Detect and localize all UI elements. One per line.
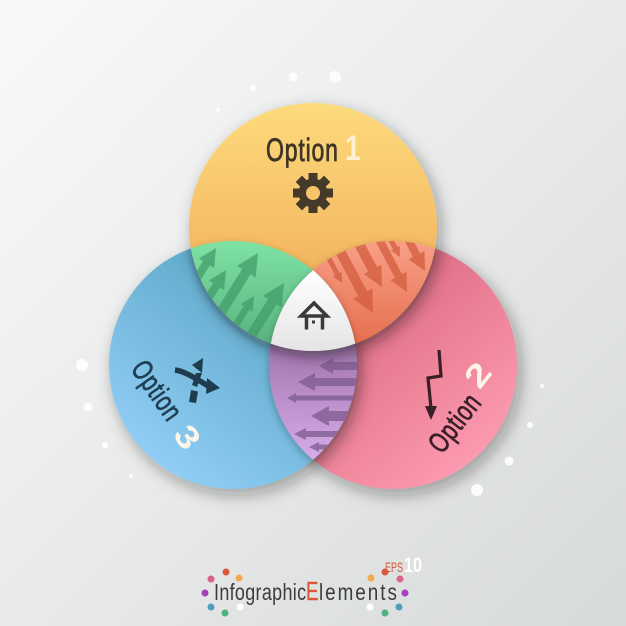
center white shape — [271, 270, 355, 351]
arrows: orange pointing down — [327, 241, 425, 313]
logo dots — [202, 568, 408, 616]
heading: option 1: Option — [266, 132, 338, 168]
logo badge: EPS 10: EPS — [385, 559, 403, 575]
lens: orange overlap — [313, 241, 435, 344]
circle: option 2 pink — [269, 241, 517, 489]
icon: gear — [293, 173, 333, 213]
logo text — [214, 576, 397, 606]
heading: option 2: 2 — [457, 355, 499, 395]
circle: option 1 yellow — [189, 103, 437, 351]
heading: option 1 — [266, 128, 361, 168]
lens: purple overlap — [269, 344, 357, 460]
logo badge: EPS 10: 10 — [404, 554, 422, 577]
logo text: E — [306, 576, 318, 606]
decorative white bubbles — [76, 71, 544, 496]
logo text: lements — [319, 580, 397, 605]
heading: option 3: 3 — [166, 419, 208, 456]
circle: option 3 blue — [109, 241, 357, 489]
logo text: Infographic — [214, 580, 306, 606]
icon: zigzag arrow — [425, 350, 441, 420]
heading: option 3: Option — [124, 355, 188, 427]
icon: crossing arrows — [175, 358, 220, 403]
heading: option 2: Option — [422, 388, 488, 459]
heading: option 2 — [411, 355, 507, 459]
arrows: purple pointing left — [287, 358, 357, 452]
heading: option 3 — [122, 355, 208, 456]
logo badge: EPS 10 — [385, 554, 422, 577]
heading: option 1: 1 — [345, 128, 361, 168]
arrows: green pointing up — [197, 248, 284, 337]
icon: home — [301, 303, 327, 330]
lens: green overlap — [191, 241, 313, 344]
